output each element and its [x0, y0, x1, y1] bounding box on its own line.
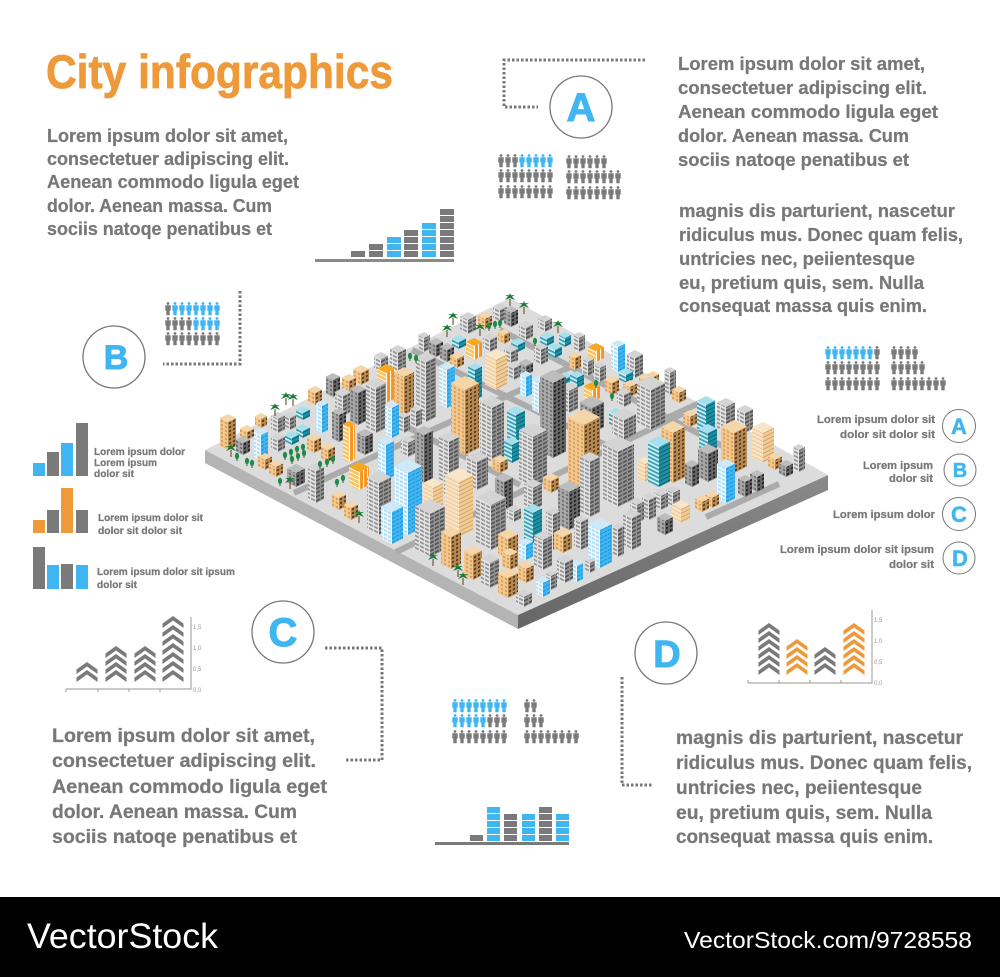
text block: A upper: Aenean commodo ligula eget [678, 102, 938, 122]
text block: intro: dolor. Aenean massa. Cum [47, 196, 272, 216]
chevron chart: D: 0,5 [874, 660, 883, 666]
badge A [550, 76, 612, 138]
text block: A upper: dolor. Aenean massa. Cum [678, 126, 909, 146]
bar chart 3 with label: Lorem ipsum dolor sit ipsum [97, 567, 235, 578]
connector B [163, 291, 240, 364]
text block: D [676, 728, 972, 848]
bar chart 3 with label [33, 547, 235, 591]
bar chart 2 with label: dolor sit dolor sit [98, 526, 183, 537]
connector D [622, 677, 652, 785]
legend: right: Lorem ipsum dolor sit ipsum [780, 544, 934, 556]
legend: right: Lorem ipsum dolor sit [817, 414, 935, 426]
badge A: A [567, 86, 595, 130]
chevron chart: C: 0,5 [193, 667, 202, 673]
legend badges [942, 410, 976, 574]
badge D: D [653, 634, 681, 676]
legend: right: Lorem ipsum [863, 460, 933, 472]
chevron chart: C: 0,0 [193, 688, 202, 694]
legend badges: C [951, 502, 967, 527]
stacked bar chart: bottom [435, 807, 569, 845]
text block: C: consectetuer adipiscing elit. [52, 751, 316, 772]
text block: D: eu, pretium quis, sem. Nulla [676, 803, 932, 824]
text block: intro: Aenean commodo ligula eget [47, 172, 299, 192]
text block: intro [47, 126, 299, 239]
title: City infographics [46, 47, 393, 99]
text block: C: Aenean commodo ligula eget [52, 777, 328, 798]
text block: D: ridiculus mus. Donec quam felis, [676, 753, 972, 774]
chevron chart: D: 1,0 [874, 639, 883, 645]
text block: A lower: eu, pretium quis, sem. Nulla [679, 273, 925, 293]
bar chart 1 with label [33, 423, 185, 480]
chevron chart: C [66, 616, 202, 694]
text block: A lower: ridiculus mus. Donec quam felis, [679, 225, 963, 245]
footer image id: VectorStock.com/9728558 [684, 927, 972, 953]
legend badges: B [953, 460, 967, 482]
text block: C: sociis natoqe penatibus et [52, 827, 298, 848]
trees [226, 293, 614, 585]
text block: D: magnis dis parturient, nascetur [676, 728, 964, 749]
badge C: C [269, 611, 297, 655]
chevron chart: D: 1,5 [874, 618, 883, 624]
badge C [252, 601, 314, 663]
text block: A lower: untricies nec, peiientesque [679, 249, 915, 269]
text block: A upper [678, 54, 938, 170]
platform [205, 298, 828, 629]
text block: intro: Lorem ipsum dolor sit amet, [47, 126, 288, 146]
legend: right: dolor sit [889, 559, 934, 571]
bar chart 1 with label: dolor sit [94, 469, 135, 480]
legend: right: dolor sit [889, 473, 933, 485]
bar chart 1 with label: Lorem ipsum [94, 458, 157, 469]
legend: right: Lorem ipsum dolor [833, 509, 936, 521]
legend badges: A [951, 414, 967, 439]
text block: A upper: sociis natoqe penatibus et [678, 150, 909, 170]
people grid: A [498, 154, 621, 199]
text block: D: untricies nec, peiientesque [676, 778, 922, 799]
legend: right [780, 414, 936, 571]
text block: intro: sociis natoqe penatibus et [47, 219, 272, 239]
roads [294, 330, 779, 552]
bar chart 2 with label: Lorem ipsum dolor sit [98, 513, 204, 524]
text block: A upper: Lorem ipsum dolor sit amet, [678, 54, 925, 74]
text block: C: Lorem ipsum dolor sit amet, [52, 726, 315, 747]
bar chart 3 with label: dolor sit [97, 580, 138, 591]
buildings [220, 303, 805, 607]
text block: A upper: consectetuer adipiscing elit. [678, 78, 927, 98]
isometric city [205, 293, 828, 629]
connector C [325, 648, 382, 760]
text block: A lower: consequat massa quis enim. [679, 296, 927, 316]
text block: A lower: magnis dis parturient, nascetur [679, 201, 955, 221]
text block: C [52, 726, 328, 848]
badge D [635, 622, 697, 684]
badge B [83, 326, 145, 388]
people grid: B [165, 302, 220, 345]
chevron chart: C: 1,5 [193, 625, 202, 631]
badge B: B [104, 339, 128, 377]
stacked bar chart: top [315, 209, 454, 262]
chevron chart: D [748, 610, 883, 687]
chevron chart: C: 1,0 [193, 646, 202, 652]
connector A [504, 60, 645, 107]
footer brand: VectorStock [27, 917, 219, 956]
bar chart 1 with label: Lorem ipsum dolor [94, 447, 185, 458]
legend: right: dolor sit dolor sit [840, 429, 935, 441]
bar chart 2 with label [33, 488, 204, 537]
text block: intro: consectetuer adipiscing elit. [47, 149, 289, 169]
text block: C: dolor. Aenean massa. Cum [52, 802, 297, 823]
people grid: bottom [452, 699, 579, 743]
footer bar [0, 897, 1000, 977]
legend badges: D [952, 546, 968, 571]
text block: D: consequat massa quis enim. [676, 827, 933, 848]
chevron chart: D: 0,0 [874, 681, 883, 687]
people grid: right [825, 346, 946, 390]
text block: A lower [679, 201, 963, 316]
